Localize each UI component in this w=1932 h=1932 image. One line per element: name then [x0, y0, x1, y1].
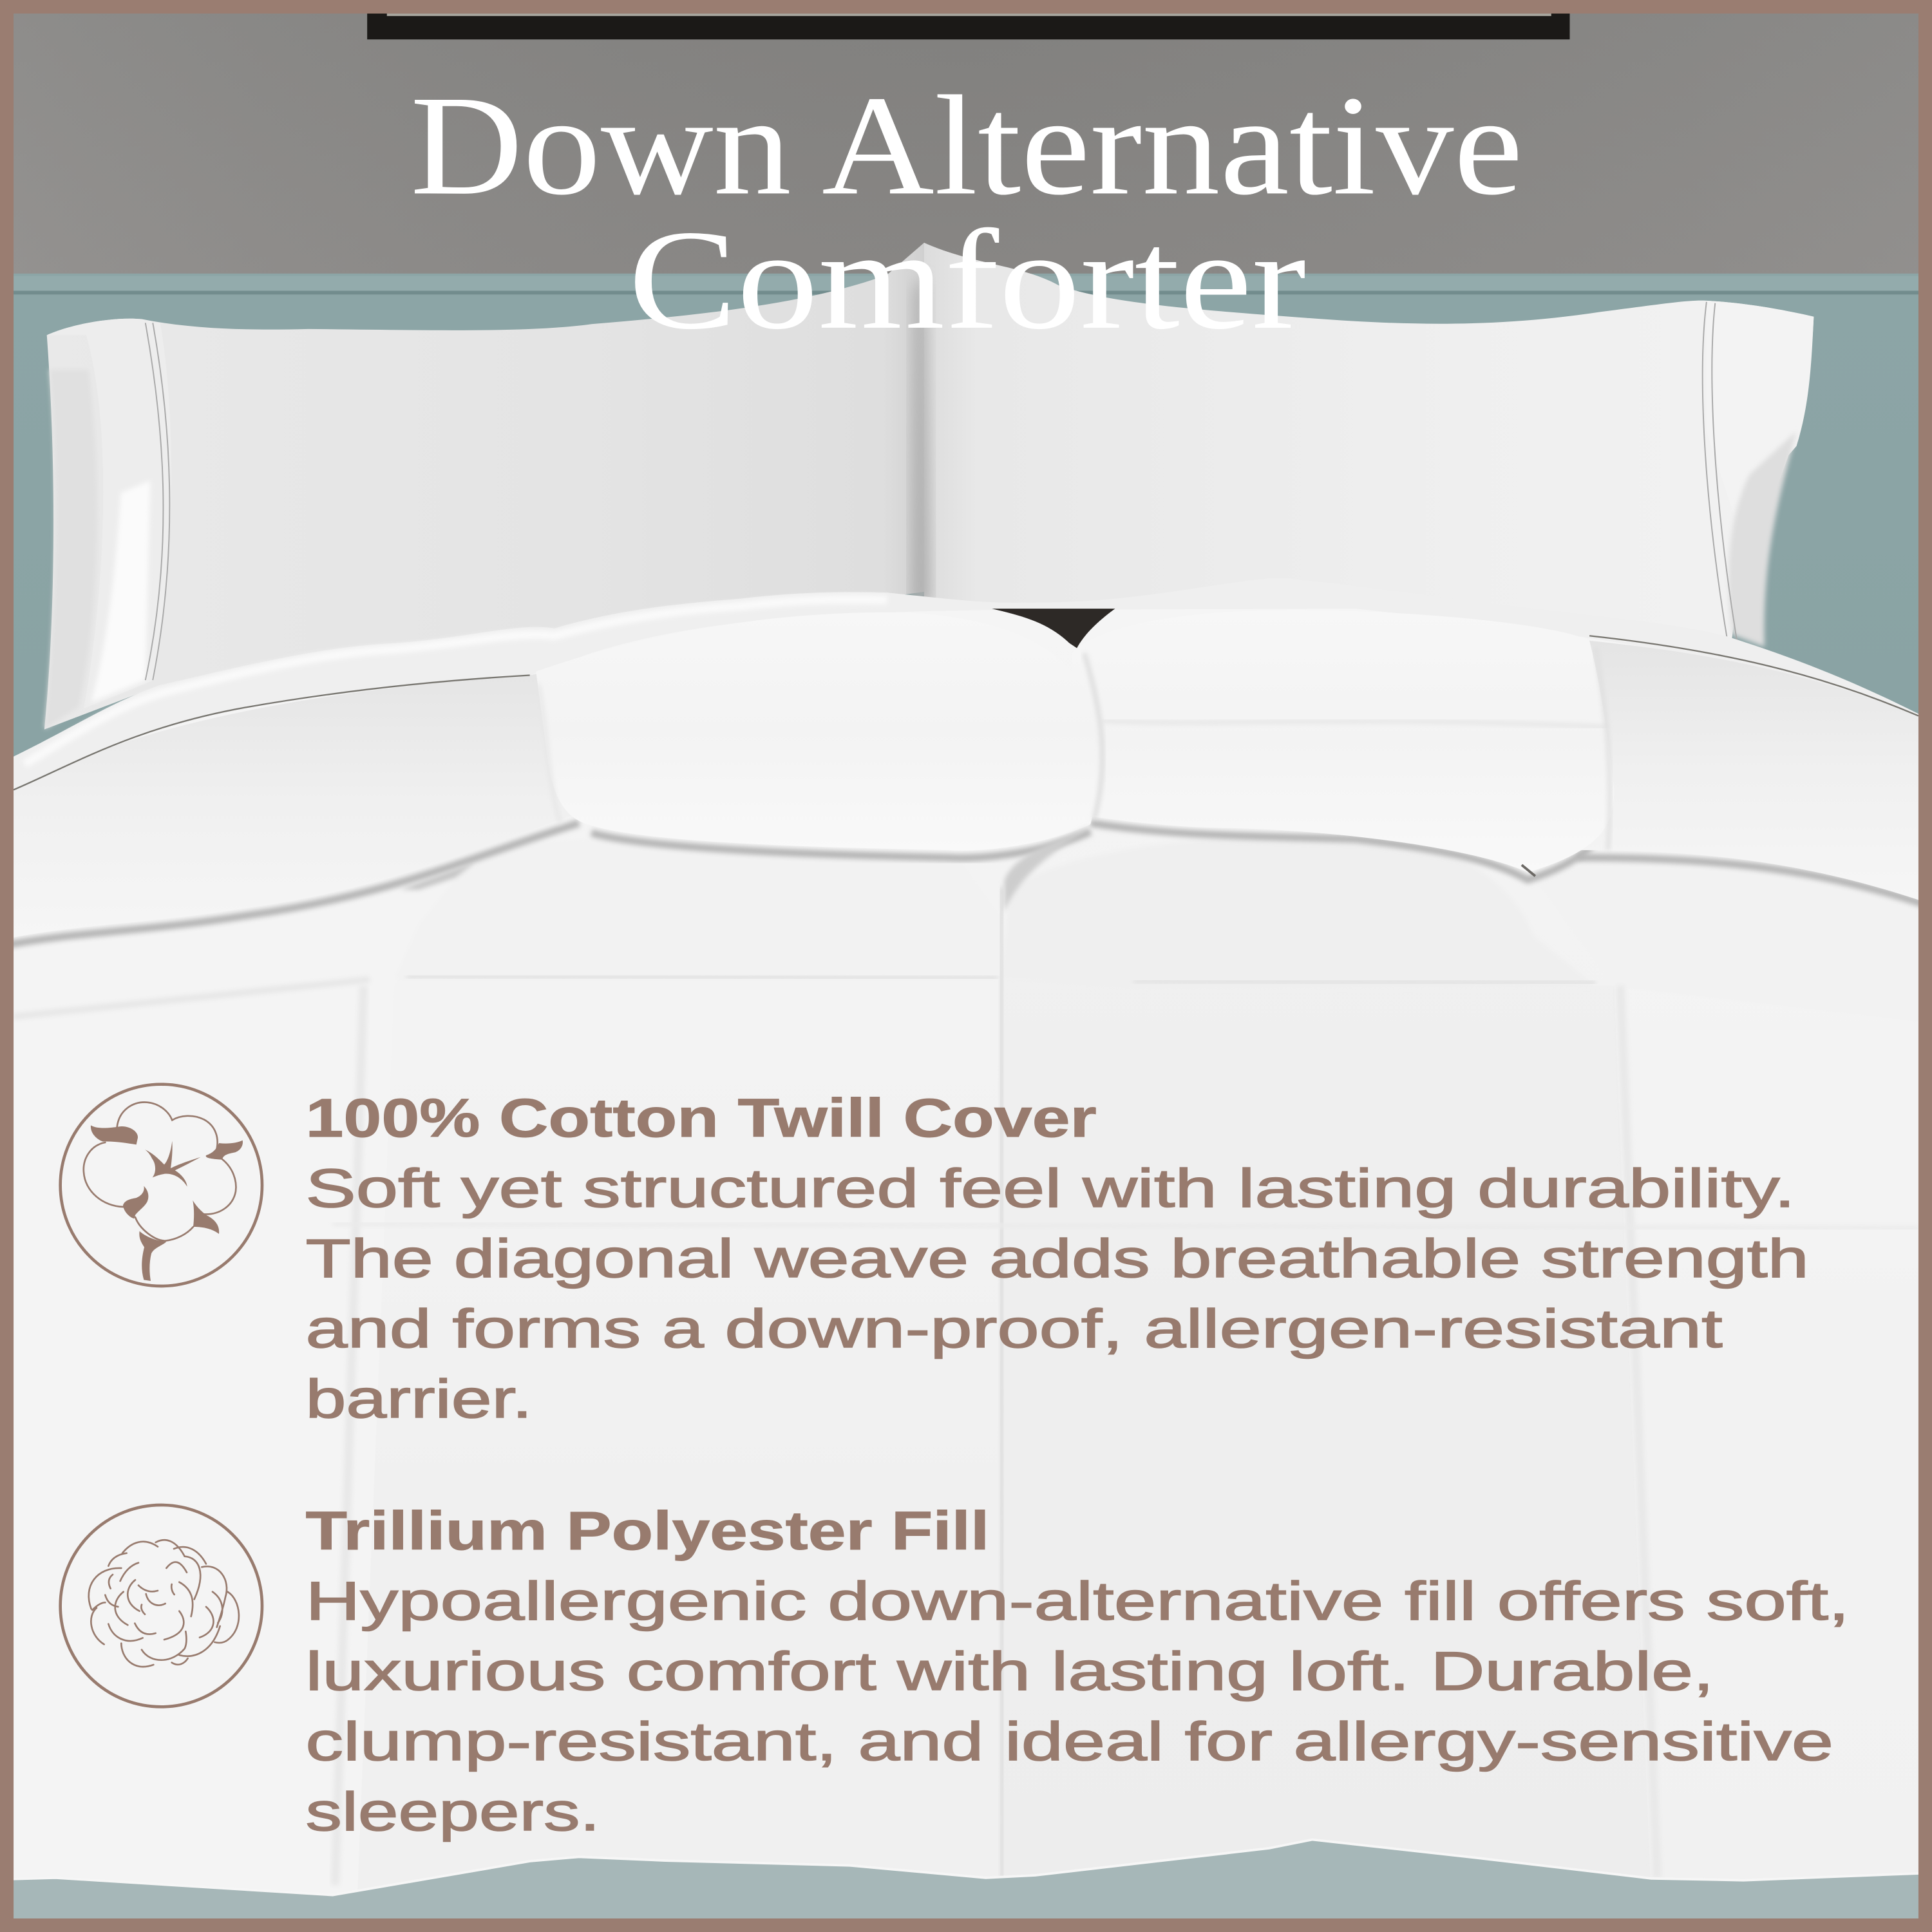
icon: fluffy fill [61, 1505, 262, 1707]
icon: cotton boll [61, 1084, 262, 1286]
visible headboard below comforter [0, 1840, 1932, 1932]
description: cotton twill [305, 1158, 1809, 1429]
title: Comforter [629, 201, 1306, 359]
feature: trillium polyester fill [61, 1501, 1850, 1842]
upper comforter baffles [0, 610, 1932, 940]
title: Down Alternative [410, 66, 1523, 225]
sheet edge highlight [24, 600, 887, 764]
description: cotton twill: barrier. [305, 1368, 533, 1429]
heading: trillium fill: Trillium Polyester Fill [305, 1501, 989, 1561]
feature: cotton twill cover [61, 1084, 1809, 1429]
faint seams [14, 887, 1918, 1885]
heading: cotton twill: 100% Cotton Twill Cover [305, 1088, 1097, 1148]
right pillow [924, 243, 1814, 647]
description: cotton twill: Soft yet structured feel with lasting durability. [305, 1158, 1795, 1218]
baffle soft shadows [0, 788, 1932, 946]
lower quilt panels [0, 835, 1932, 1897]
description: trillium fill: Hypoallergenic down-alternative fill offers soft, [305, 1571, 1850, 1631]
gap shadow [992, 609, 1115, 648]
comforter base [0, 609, 1932, 1897]
description: cotton twill: The diagonal weave adds breathable strength [305, 1228, 1809, 1289]
baffle folds [538, 647, 1610, 850]
top sheet fold [0, 578, 1932, 862]
description: trillium fill: sleepers. [305, 1781, 600, 1842]
title [410, 66, 1523, 359]
description: trillium fill [305, 1571, 1850, 1842]
left pillow [44, 243, 927, 730]
comforter edge line [14, 636, 1918, 790]
description: trillium fill: clump-resistant, and ideal for allergy-sensitive [305, 1711, 1833, 1772]
picture frame [367, 14, 1570, 39]
description: cotton twill: and forms a down-proof, allergen-resistant [305, 1298, 1723, 1359]
dark shadow gaps [401, 826, 1535, 912]
pillow seam shadow [912, 277, 931, 604]
description: trillium fill: luxurious comfort with lasting loft. Durable, [305, 1641, 1714, 1701]
wall [0, 0, 1932, 278]
